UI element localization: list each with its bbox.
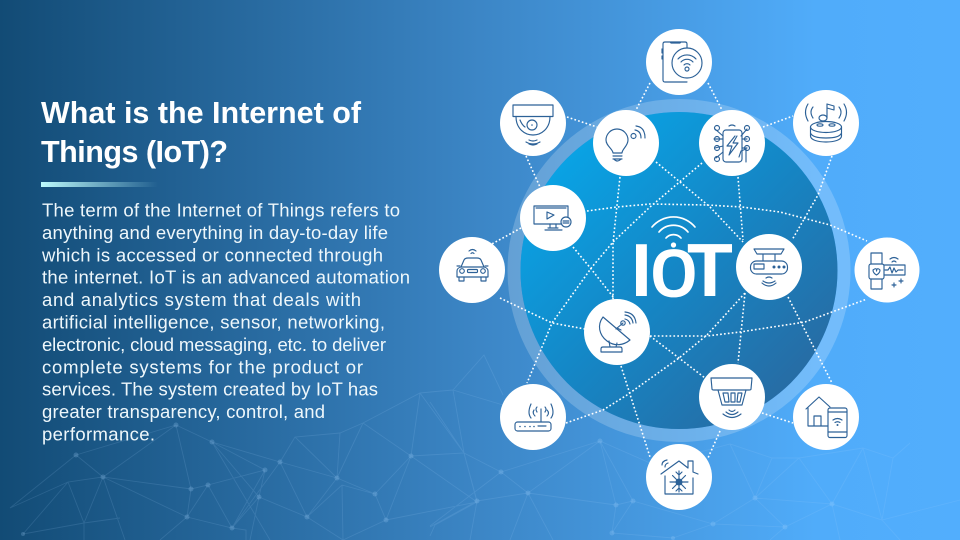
title: What is the Internet of [41,96,362,130]
icon: smart bulb [593,110,659,176]
title underline accent [41,182,158,187]
description text block: services. The system created by IoT has [42,379,378,400]
description text block: performance. [42,424,155,444]
icon: smart speaker [793,90,859,156]
icon: smart home phone [793,384,859,450]
IoT logo text: I [631,228,652,312]
icon: satellite dish [584,299,650,365]
icon: smartphone wifi [646,29,712,95]
IoT logo text: o [650,220,697,314]
icon: wifi router [500,384,566,450]
description text block: complete systems for the product or [42,356,363,377]
description text block: The term of the Internet of Things refers to [42,200,400,220]
icon: wifi above IoT [652,217,695,247]
icon: smartwatch [854,238,920,302]
icon: ceiling modem [736,234,802,300]
title [41,96,362,169]
icon: smart TV [520,185,586,251]
icon: house climate snowflake [646,444,712,510]
title: Things (IoT)? [41,135,228,169]
description text block: which is accessed or connected through [41,244,383,265]
description text block: artificial intelligence, sensor, networking, [42,312,385,332]
description text block: electronic, cloud messaging, etc. to deliver [42,334,386,355]
icon: circuit phone [699,110,765,176]
background network mesh [10,355,960,540]
description text block: and analytics system that deals with [42,289,361,310]
description text block [41,200,410,444]
IoT logo text: T [687,228,733,312]
central globe with ring [514,106,844,436]
icon: security camera [500,90,566,156]
icon: smoke detector [699,364,765,430]
description text block: anything and everything in day-to-day life [42,222,388,243]
dotted connection lines [490,83,867,458]
description text block: greater transparency, control, and [42,401,325,422]
icon: connected car [439,237,505,303]
description text block: the internet. IoT is an advanced automation [42,267,410,288]
